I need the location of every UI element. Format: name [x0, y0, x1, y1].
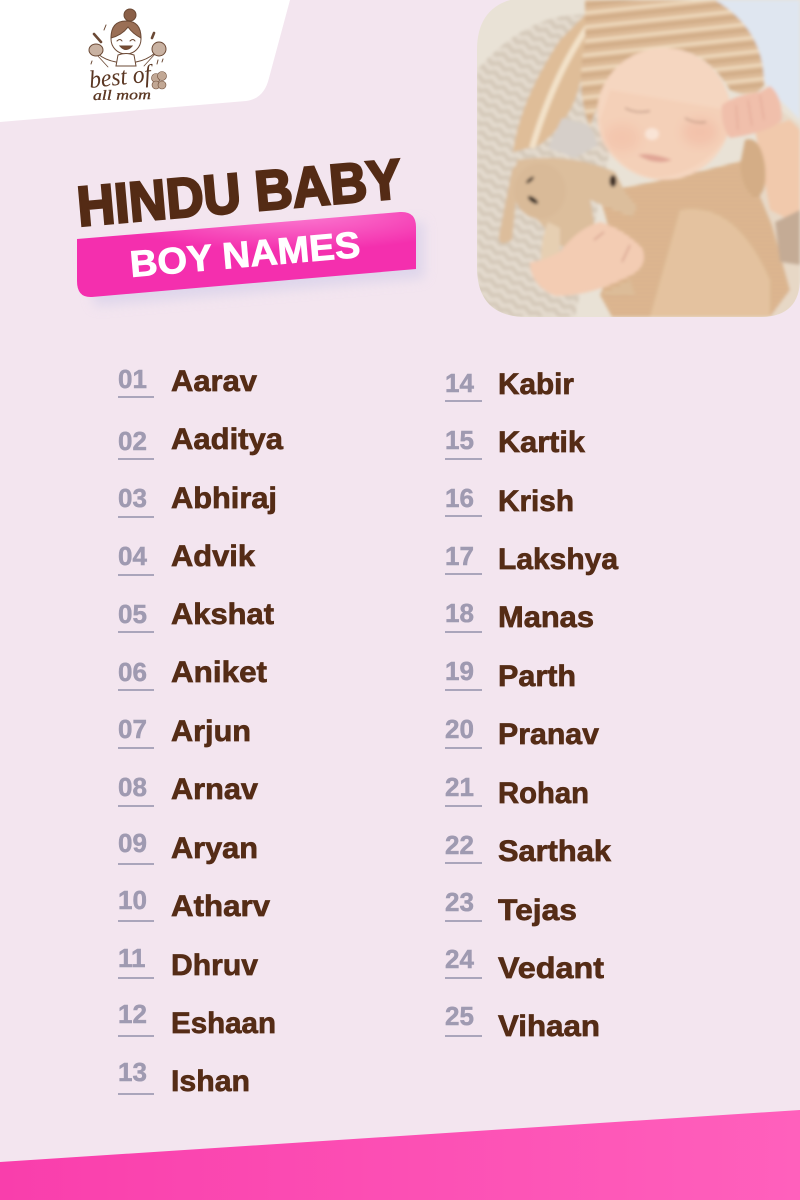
item 24: Vedant [498, 952, 604, 985]
face [597, 48, 731, 180]
item 16: Krish [498, 485, 574, 518]
item 22 [445, 830, 611, 868]
item 03: 03 [118, 483, 147, 513]
item 08: Arnav [171, 773, 258, 806]
item 14: Kabir [498, 368, 574, 401]
white logo corner panel [0, 0, 290, 122]
item 22: 22 [445, 830, 474, 860]
item 02 [118, 423, 283, 460]
item 23 [445, 887, 577, 927]
hand right [722, 86, 782, 138]
item 23: 23 [445, 887, 474, 917]
item 13 [118, 1057, 250, 1098]
item 17 [445, 541, 618, 576]
item 15 [445, 425, 585, 460]
item 05: Akshat [171, 598, 274, 631]
item 10 [118, 885, 270, 923]
item 20: 20 [445, 714, 474, 744]
item 11: 11 [118, 943, 146, 973]
item 19: Parth [498, 660, 576, 693]
item 21 [445, 772, 589, 810]
item 25: 25 [445, 1001, 474, 1031]
arm right [755, 120, 800, 225]
item 02: Aaditya [171, 423, 283, 456]
item 03: Abhiraj [171, 482, 277, 515]
item 18: 18 [445, 598, 474, 628]
item 09: 09 [118, 828, 147, 858]
item 16 [445, 483, 574, 518]
item 20: Pranav [498, 718, 599, 751]
item 21: Rohan [498, 777, 589, 810]
item 06: Aniket [171, 656, 267, 689]
item 25 [445, 1001, 600, 1043]
item 24 [445, 944, 604, 985]
item 18: Manas [498, 601, 594, 634]
item 19 [445, 656, 576, 693]
footer pink band [0, 1110, 800, 1200]
item 04: 04 [118, 541, 147, 571]
knit body [600, 160, 790, 317]
item 12: 12 [118, 999, 147, 1029]
item 17: Lakshya [498, 543, 618, 576]
names column 1 [118, 364, 283, 1098]
item 05: 05 [118, 599, 147, 629]
item 12 [118, 999, 276, 1040]
logo: best of all mom [88, 9, 166, 104]
subtitle text: BOY NAMES [128, 224, 362, 285]
item 13: 13 [118, 1057, 147, 1087]
item 09: Aryan [171, 832, 258, 865]
item 09 [118, 828, 258, 865]
item 20 [445, 714, 599, 751]
item 14: 14 [445, 368, 474, 398]
item 19: 19 [445, 656, 474, 686]
item 08: 08 [118, 772, 147, 802]
item 12: Eshaan [171, 1007, 276, 1040]
item 03 [118, 482, 277, 518]
item 07 [118, 714, 251, 749]
item 04 [118, 540, 255, 576]
logo wordmark: best of [88, 60, 155, 94]
item 14 [445, 368, 574, 402]
logo tagline: all mom [93, 88, 151, 104]
item 16: 16 [445, 483, 474, 513]
item 10: Atharv [171, 890, 270, 923]
item 15: 15 [445, 425, 474, 455]
icon: mom character [89, 9, 166, 67]
item 18 [445, 598, 594, 634]
item 10: 10 [118, 885, 147, 915]
item 07: 07 [118, 714, 147, 744]
hat ear [512, 16, 587, 152]
item 15: Kartik [498, 426, 585, 459]
item 24: 24 [445, 944, 474, 974]
banner: Boy Names [77, 212, 424, 306]
item 21: 21 [445, 772, 474, 802]
item 04: Advik [171, 540, 255, 573]
photo: sleeping baby in knit bunny outfit [477, 0, 800, 317]
names column 2 [445, 368, 618, 1043]
item 02: 02 [118, 426, 147, 456]
item 07: Arjun [171, 715, 251, 748]
item 11: Dhruv [171, 949, 258, 982]
item 11 [118, 943, 258, 982]
item 05 [118, 598, 274, 633]
strap [740, 139, 766, 198]
item 23: Tejas [498, 894, 577, 927]
item 13: Ishan [171, 1065, 250, 1098]
item 25: Vihaan [498, 1010, 600, 1043]
item 06: 06 [118, 657, 147, 687]
item 01: 01 [118, 364, 147, 394]
item 08 [118, 772, 258, 807]
icon: butterfly [152, 72, 166, 89]
item 01: Aarav [171, 365, 257, 398]
item 22: Sarthak [498, 835, 611, 868]
title: Hindu Baby: HINDU BABY [75, 147, 404, 238]
item 01 [118, 364, 257, 398]
item 17: 17 [445, 541, 474, 571]
toy bunny [499, 160, 520, 243]
hand lower [530, 222, 644, 296]
item 06 [118, 656, 267, 691]
hat crown [581, 0, 764, 128]
